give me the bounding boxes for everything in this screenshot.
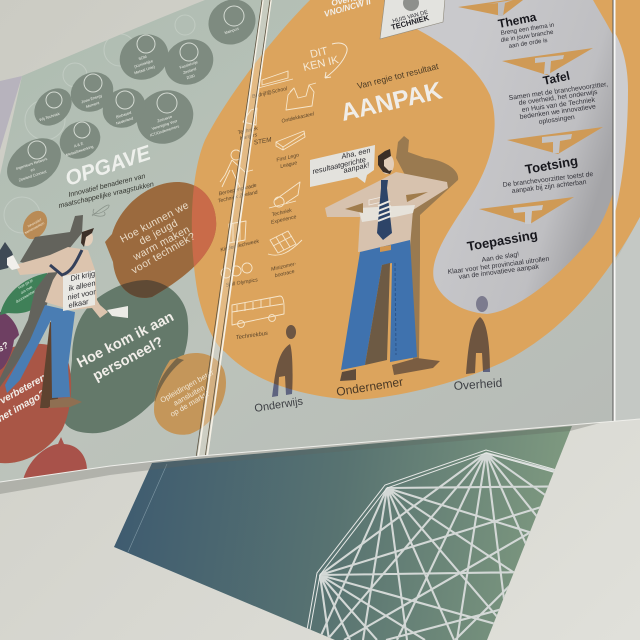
person: Onderwijs: Onderwijs <box>254 395 304 415</box>
circle: Wij Techniek <box>34 88 72 126</box>
step: Thema: Breng een thema in <box>500 22 555 37</box>
card: Huis van de Techniek logo <box>380 0 445 39</box>
activity: Minizomerbootrace <box>268 231 302 279</box>
step: Tafel: oplossingen <box>538 114 575 126</box>
decorative watermark circles <box>4 15 195 233</box>
circle: SDM <box>120 34 168 80</box>
shadow between legs <box>365 263 390 365</box>
hair and beard <box>378 149 392 174</box>
jeans stitching <box>395 263 396 355</box>
activity: Techniek Experience: Experience <box>270 214 297 226</box>
step: Toetsing: Toetsing <box>524 153 579 177</box>
step: Tafel: Samen met de branchevoorzitter, <box>508 81 609 102</box>
circle: Ingenieur Netwerk: Ingenieurs Netwerk <box>16 157 48 171</box>
step: Toepassing <box>447 197 574 281</box>
circle: Zeeuwse Vereniging <box>137 90 194 144</box>
circle: Mainport <box>208 0 256 44</box>
shadow under folder <box>0 423 600 494</box>
panel: process steps light blob <box>415 0 628 314</box>
left hand shadow <box>0 242 14 270</box>
bubble: Hoe kunnen we de jeugd warm maken voor techniek: voor techniek? <box>130 231 198 277</box>
step: Tafel: en Huis van de Techniek <box>521 97 596 114</box>
step: Toetsing <box>502 127 603 195</box>
opgave subtitle: Innovatief benaderen van <box>68 173 146 199</box>
panel: aanpak orange blob <box>192 0 640 400</box>
circle: A en E Metaalbewerking: Metaalbewerking <box>65 145 94 157</box>
circle: Jouw Energy Moment: Jouw Energy <box>81 94 103 104</box>
arm gaps <box>345 192 428 213</box>
circle: Fossielvrije Zeeland: 2030 <box>186 74 195 80</box>
step: Tafel: bedenken we innovatieve <box>519 103 596 121</box>
sliver of back page <box>0 76 22 150</box>
bubble: Hoe kunnen we de jeugd warm maken voor techniek: de jeugd <box>138 218 180 248</box>
activity: Techniek Kanjers <box>237 108 259 142</box>
necktie <box>50 250 82 275</box>
activity: Beroepenparade: Beroepenparade <box>218 183 257 197</box>
handwritten note: Dit ken ik: DIT <box>309 45 329 61</box>
bubble: Opleidingen beter aansluiten: op de markt? <box>168 389 211 419</box>
crossed forearm <box>358 205 415 222</box>
activity: Techniek Kanjers: Kanjers <box>240 132 258 142</box>
bubble: Hoe kunnen we de jeugd warm maken voor techniek: Hoe kunnen we <box>119 200 191 246</box>
hair and beard <box>81 228 94 247</box>
step: Toepassing: Aan de slag! <box>481 251 520 264</box>
bubble: Hoe kom ik aan personeel <box>63 280 188 433</box>
step: Thema: die in jouw branche <box>500 29 555 44</box>
sign: Dit krijg <box>70 269 97 283</box>
activity: Minizomerbootrace: Minizomer- <box>271 261 297 273</box>
step: Toetsing: De branchevoorzitter toetst de <box>502 171 594 189</box>
breast pocket <box>369 197 382 205</box>
panel: blob bulge beyond fold <box>615 33 628 213</box>
circle: Mainport: Mainport <box>224 27 240 35</box>
activity: Kinder Techweek: Kinder Techweek <box>220 239 260 253</box>
bubble: Hoe kunnen we de jeugd warm maken voor techniek: warm maken <box>131 224 192 264</box>
circle: Wij Techniek: Wij Techniek <box>39 112 61 122</box>
card: Huis van de Techniek logo: TECHNIEK <box>390 13 431 32</box>
activity: Techniek Experience <box>269 182 300 226</box>
bubble: duurzaamheid green <box>0 273 47 315</box>
activity: Skill Olympics <box>221 263 259 289</box>
circle: Ingenieur Netwerk <box>7 138 61 188</box>
bubble: duurzaamheid green: om met <box>20 285 34 295</box>
speech bubble: Aha, een resultaatgerichte aanpak: Aha, een <box>339 146 371 161</box>
head <box>380 154 394 174</box>
opgave subtitle: maatschappelijke vraagstukken <box>58 181 155 210</box>
bubble: small orange: innovatief <box>27 218 42 228</box>
activity: First Lego League: First Lego <box>276 152 300 164</box>
activity: Bedrijf@School <box>252 71 293 100</box>
head <box>81 230 93 246</box>
activity: Bedrijf@School: Bedrijf@School <box>252 86 289 100</box>
icon group: aanpak activities <box>217 71 316 341</box>
left hand <box>7 255 20 270</box>
circle: Fossielvrije Zeeland: Fossielvrije <box>179 60 198 70</box>
figure: worried man with sign <box>0 215 128 408</box>
circle: Zeeuwse Vereniging: Vereniging Voor <box>151 119 179 131</box>
sign <box>63 269 97 311</box>
bubble: small orange: samenwerken <box>24 221 45 235</box>
panel: opgave circles <box>7 0 256 188</box>
shoe <box>50 397 82 408</box>
circle: A en E Metaalbewerking: A & E <box>74 142 84 148</box>
circle: Ingenieur Netwerk: en <box>30 167 35 173</box>
step: Toepassing: van de innovatieve aanpak <box>458 263 540 281</box>
folder sheet <box>0 0 640 490</box>
step: Tafel: de overheid, het onderwijs <box>518 89 598 107</box>
bubble: imago <box>0 344 71 463</box>
step: Thema: aan de orde is <box>508 37 548 50</box>
heading: OPGAVE: OPGAVE <box>62 141 154 191</box>
card: Huis van de Techniek logo: HUIS VAN DE <box>392 10 429 25</box>
person: Overheid <box>453 296 503 393</box>
belt buckle <box>380 245 391 252</box>
activity: First Lego League <box>276 131 305 170</box>
speech bubble: Aha, een resultaatgerichte aanpak <box>310 145 375 187</box>
label: Ondernemer: Ondernemer <box>335 375 404 399</box>
activity: Techniekbus <box>232 296 284 341</box>
sign: ik alleen <box>68 278 96 293</box>
person: Onderwijs <box>254 325 304 415</box>
activity: Techniek Experience: Techniek <box>271 208 293 218</box>
activity: Ontdekkasteel: Ontdekkasteel <box>281 111 315 125</box>
trouser shadow <box>40 322 60 408</box>
man shadow <box>396 136 458 360</box>
activity: Skill Olympics: Skill Olympics <box>225 277 259 289</box>
doodle scribble <box>92 205 109 216</box>
panel: right flap lighter paper <box>615 217 640 422</box>
booklet with geometric cover <box>114 426 600 640</box>
speech bubble: Aha, een resultaatgerichte aanpak: aanpak! <box>342 160 370 175</box>
bubble: duurzaamheid green: Hoe ga je <box>17 278 34 290</box>
circle: SDM: (Koninklijke <box>134 59 154 69</box>
step: Tafel: Tafel <box>542 69 571 88</box>
handwritten note: Dit ken ik <box>302 43 347 78</box>
subtitle: Van regie tot resultaat: Van regie tot resultaat <box>356 61 440 91</box>
activity: Techniek Kanjers: Techniek <box>237 126 259 136</box>
bubble: Hoe kunnen we de jeugd warm maken voor techniek <box>105 182 216 298</box>
bubble: Hoe kom ik aan personeel: Hoe kom ik aan <box>75 309 177 372</box>
circle: Ingenieur Netwerk: Zeeland Connect <box>18 169 48 182</box>
fold: left double crease <box>196 0 271 458</box>
speech bubble: Aha, een resultaatgerichte aanpak: resultaatgerichte <box>311 155 367 176</box>
bubble: Opleidingen beter aansluiten <box>154 353 226 435</box>
step: Toepassing: Klaar voor het provinciaal uitrollen <box>447 256 550 276</box>
man shadow <box>0 215 83 387</box>
tie stripes <box>378 201 391 221</box>
handwritten note: Dit ken ik: KEN IK <box>302 54 340 74</box>
activity: Beroepenparade <box>217 150 259 205</box>
shoe right <box>392 358 440 375</box>
bubble: lower red <box>24 437 87 478</box>
circle: Jouw Energy Moment: Moment <box>86 101 101 109</box>
circle: Zeeuwse Vereniging: Zeeuwse <box>157 115 173 123</box>
activity: First Lego League: League <box>280 160 298 170</box>
jeans <box>5 305 75 398</box>
activity: Kinder Techweek <box>220 221 260 253</box>
activity: Minizomerbootrace: bootrace <box>274 269 295 279</box>
step: Toetsing: aanpak bij zijn achterban <box>511 179 587 195</box>
folder bottom edge highlight <box>0 419 640 482</box>
heading: AANPAK: AANPAK <box>338 77 445 127</box>
shirt and arms <box>15 247 108 318</box>
person: Overheid: Overheid <box>453 376 503 393</box>
activity: Ontdekkasteel <box>281 83 316 125</box>
activity: Techniekbus: Techniekbus <box>235 331 268 341</box>
bubble: Opleidingen beter aansluiten: Opleidingen beter <box>159 368 216 405</box>
step: Thema <box>458 0 555 50</box>
circle: SDM: Metaal Unie) <box>134 65 156 75</box>
fold: right crease <box>613 0 614 425</box>
shoe left <box>340 369 356 381</box>
step: Tafel <box>502 48 609 126</box>
bubble: duurzaamheid green: duurzaamheid <box>15 288 38 304</box>
activity: STEM: STEM <box>253 136 273 147</box>
circle: Biobased Nederland <box>102 88 144 128</box>
jeans <box>341 240 417 370</box>
bubble: Opleidingen beter aansluiten: aansluiten <box>172 383 206 408</box>
necktie <box>377 180 392 240</box>
torso and arms <box>325 172 448 252</box>
right hand <box>107 306 128 318</box>
circle: A en E Metaalbewerking <box>60 121 100 159</box>
geodesic line pattern <box>306 450 555 640</box>
circle: Biobased Nederland: Biobased <box>116 111 132 119</box>
bubble: purple <box>0 312 19 370</box>
bubble: Hoe kom ik aan personeel: personeel? <box>90 334 166 385</box>
circle: Biobased Nederland: Nederland <box>116 116 134 126</box>
figure: businessman with arms crossed <box>325 136 458 381</box>
sign: elkaar <box>68 297 90 310</box>
circle: SDM: SDM <box>138 55 147 61</box>
step: Toepassing: Toepassing <box>466 227 539 254</box>
bubble: small orange <box>22 210 48 240</box>
step: Thema: Thema <box>497 10 538 31</box>
circle: Zeeuwse Vereniging: ICT/Ondernemers <box>150 124 180 138</box>
sign: niet voor <box>67 287 97 302</box>
circle: Fossielvrije Zeeland: Zeeland <box>183 67 197 75</box>
activity: Beroepenparade: Techniek Zeeland <box>217 189 259 205</box>
circle: Fossielvrije Zeeland <box>164 39 214 85</box>
circle: Jouw Energy Moment <box>70 72 114 112</box>
